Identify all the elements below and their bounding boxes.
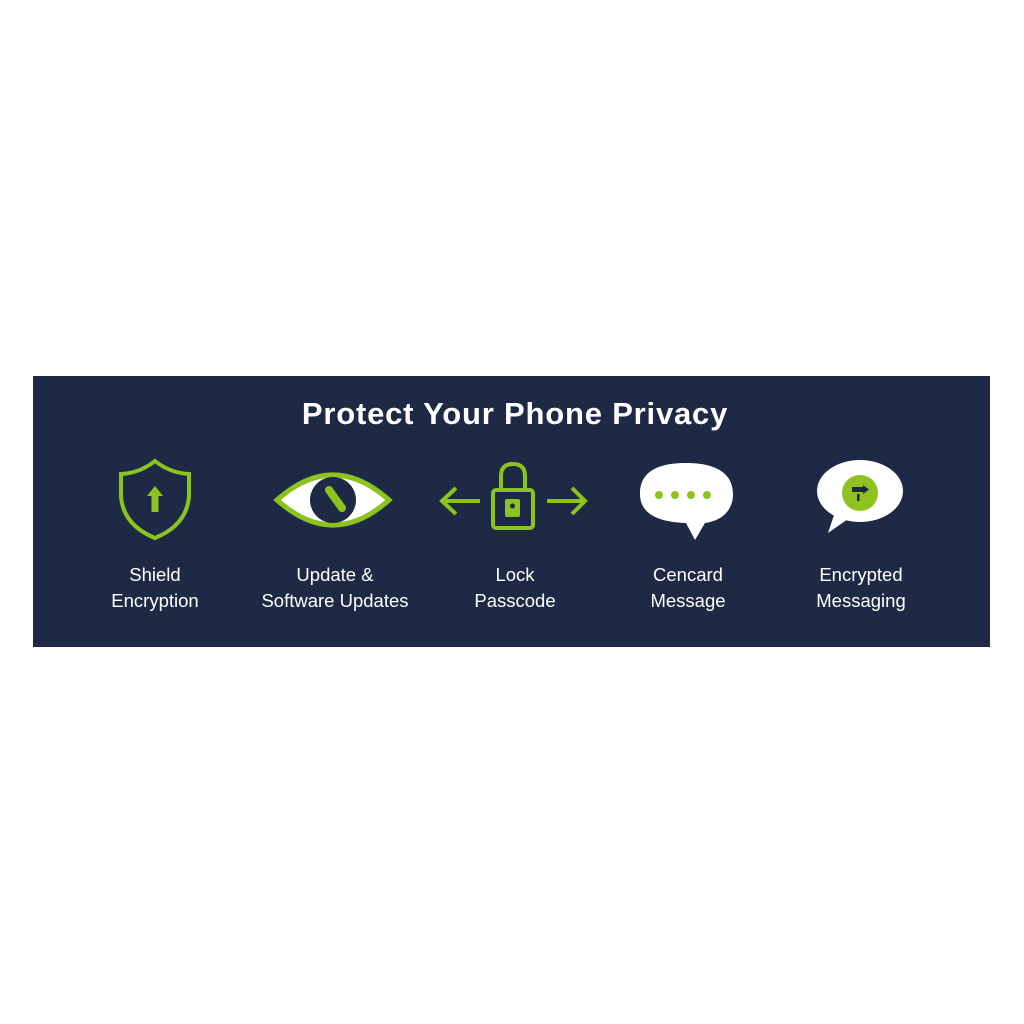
panel: banner <box>33 376 990 647</box>
labels: Lock <box>495 564 535 585</box>
labels: Passcode <box>474 590 556 611</box>
labels <box>111 564 906 611</box>
labels: Encrypted <box>819 564 903 585</box>
labels: Encryption <box>111 590 199 611</box>
labels: Shield <box>129 564 181 585</box>
labels: Software Updates <box>261 590 409 611</box>
icon: lock with arrows <box>442 464 585 528</box>
icon: eye <box>277 475 389 525</box>
labels: Cencard <box>653 564 723 585</box>
icon: message bubble dots <box>640 463 733 540</box>
labels: Messaging <box>816 590 906 611</box>
labels: Message <box>650 590 726 611</box>
title: Protect Your Phone Privacy <box>302 396 728 431</box>
icon: shield <box>121 461 189 538</box>
labels: Update & <box>296 564 374 585</box>
icon: encrypted bubble <box>817 460 903 533</box>
